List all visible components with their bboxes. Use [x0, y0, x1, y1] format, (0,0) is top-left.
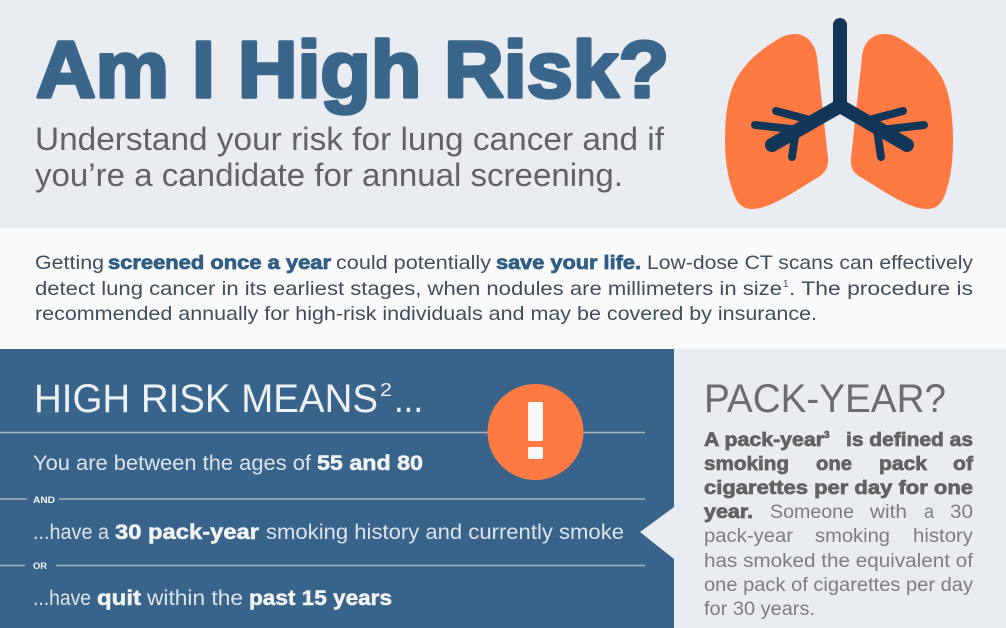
text line 2: detect lung cancer in its earliest stages, when nodules are millimeters in size	[35, 278, 782, 300]
definition text: Someone	[770, 502, 854, 523]
definition text: smoking	[815, 526, 890, 547]
definition text: has smoked the equivalent of	[704, 551, 974, 572]
criterion: age	[33, 452, 423, 475]
text line 3: recommended annually for high-risk individuals and may be covered by insurance.	[35, 303, 817, 325]
criterion: age: You are between the ages of	[33, 452, 311, 475]
criterion: quit: within the	[146, 587, 243, 610]
definition text: smoking	[704, 454, 789, 475]
heading: HIGH RISK MEANS	[34, 377, 378, 421]
subtitle: you’re a candidate for annual screening.	[35, 157, 623, 193]
icon: lungs	[725, 25, 953, 209]
definition text: pack	[879, 454, 927, 475]
definition text: one pack of cigarettes per day	[704, 575, 974, 596]
text line 1	[35, 252, 973, 274]
text line 1: Low-dose CT scans can effectively	[647, 252, 973, 274]
criterion: smoking history: smoking history and currently smoke	[266, 521, 624, 544]
text line 2: . The procedure is	[789, 278, 973, 300]
definition text: year.	[704, 502, 753, 523]
heading: 2	[380, 380, 392, 400]
heading: PACK-YEAR?	[704, 377, 946, 421]
callout pointer	[640, 507, 674, 559]
panel: high risk means	[0, 349, 674, 628]
definition text: A pack-year	[704, 430, 825, 451]
criterion: quit: quit	[97, 587, 141, 610]
icon: exclamation badge	[488, 384, 584, 480]
text line 1: could potentially	[336, 252, 491, 274]
definition text: 3	[824, 430, 830, 441]
criterion: quit: ...have	[33, 587, 91, 610]
definition text: a	[924, 502, 934, 523]
definition text: history	[913, 526, 974, 547]
definition text: is defined as	[846, 430, 973, 451]
text line 1: screened once a year	[108, 252, 331, 274]
text line 1: Getting	[35, 252, 104, 274]
panel: header	[0, 0, 1006, 228]
definition text: one	[816, 454, 852, 475]
text line 1: save your life.	[496, 252, 641, 274]
definition text: pack-year	[704, 526, 794, 547]
text line 2: 1	[783, 279, 789, 290]
criterion: smoking history: 30 pack-year	[115, 521, 259, 544]
definition text: for 30 years.	[704, 599, 815, 620]
criterion: age: 55 and 80	[317, 452, 423, 475]
label: and: AND	[33, 495, 55, 506]
subtitle: Understand your risk for lung cancer and if	[35, 121, 664, 157]
label: or: OR	[33, 561, 47, 572]
criterion: smoking history	[33, 521, 624, 544]
criterion: quit: past 15 years	[249, 587, 392, 610]
title: Am I High Risk?	[36, 25, 669, 114]
criterion: quit	[33, 587, 392, 610]
panel: pack-year definition	[640, 349, 1006, 628]
criterion: smoking history: ...have a	[33, 521, 109, 544]
definition text: of	[953, 454, 974, 475]
subtitle	[35, 121, 664, 193]
definition text	[704, 430, 974, 620]
definition text: with	[869, 502, 907, 523]
panel: introduction	[0, 228, 1006, 349]
definition text: cigarettes per day for one	[704, 478, 973, 499]
heading: ...	[394, 377, 423, 421]
definition text: 30	[950, 502, 973, 523]
